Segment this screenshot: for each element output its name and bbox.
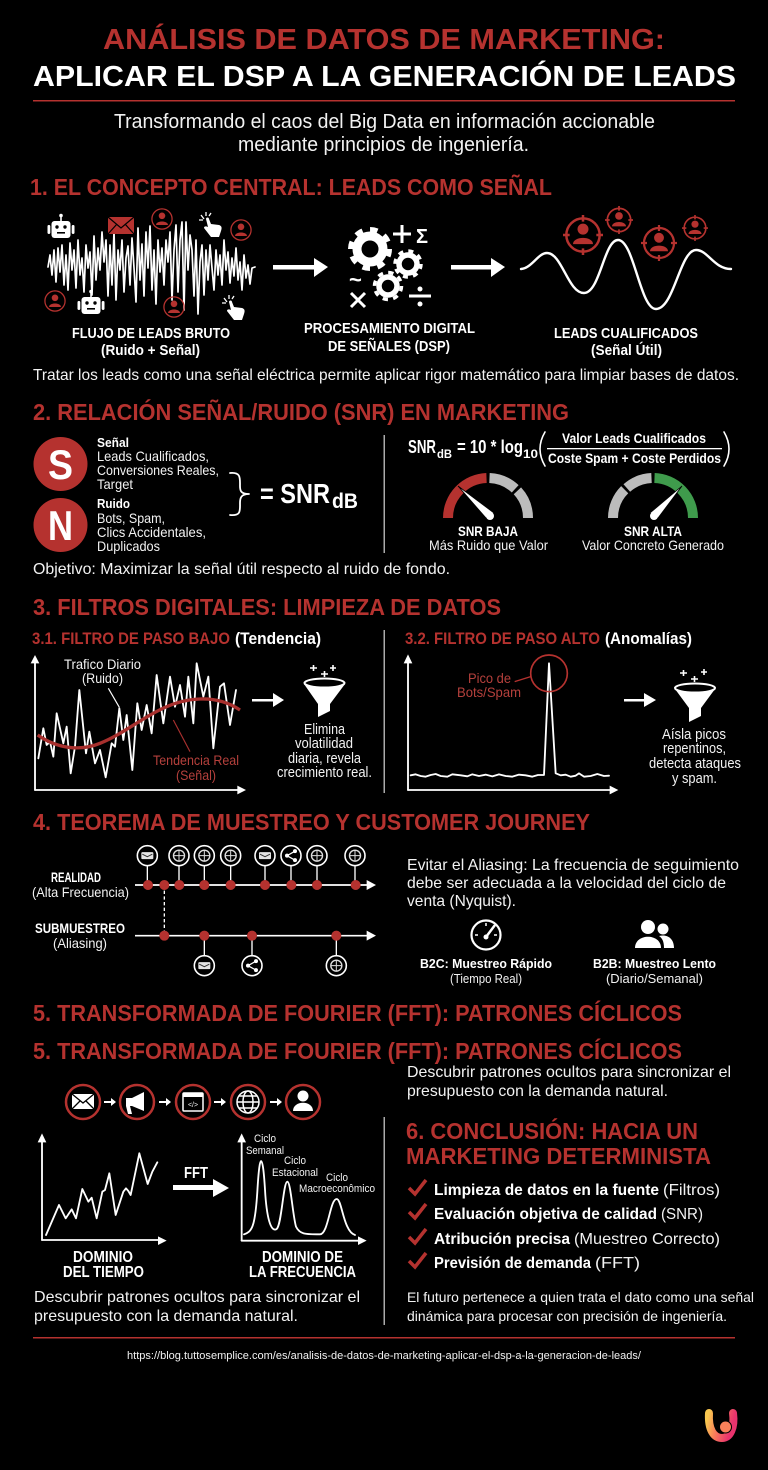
chart: low-pass: Tendencia Real [153, 752, 239, 768]
icon: people [635, 920, 674, 948]
title [33, 22, 736, 102]
label: DSP: PROCESAMIENTO DIGITAL [304, 320, 475, 337]
icon: gears and math [349, 225, 431, 307]
icon: click hand top [199, 212, 222, 237]
heading: section 5 repeated: 5. TRANSFORMADA DE FOURIER (FFT): PATRONES CÍCLICOS [33, 1037, 682, 1064]
label: time domain [63, 1249, 144, 1281]
list: conclusions: Previsión de demanda [434, 1255, 591, 1272]
label: time domain: DEL TIEMPO [63, 1264, 144, 1281]
text: FFT description left: Descubrir patrones ocultos para sincronizar el [34, 1289, 360, 1306]
icon: robot bottom [78, 290, 104, 314]
label: high SNR: Valor Concreto Generado [582, 537, 724, 553]
list: conclusions: (Filtros) [663, 1182, 720, 1199]
formula: SNR: Valor Leads Cualificados [562, 430, 706, 446]
icon: target lead 3 [641, 225, 677, 261]
label: DSP: DE SEÑALES (DSP) [328, 337, 450, 355]
chart: high-pass [404, 654, 618, 794]
text: high-pass description: Aísla picos [662, 726, 726, 743]
icon: target lead 1 [563, 215, 603, 255]
label: reality [32, 869, 129, 900]
text: section 1 caption: Tratar los leads como una señal eléctrica permite aplicar rigor matemático para limpiar bases de datos. [33, 367, 739, 384]
label: B2B: (Diario/Semanal) [606, 971, 703, 986]
icon: speedometer [472, 920, 500, 950]
formula: SNR: Coste Spam + Coste Perdidos [548, 450, 721, 466]
text: noise list: Bots, Spam, [97, 510, 165, 526]
list: conclusions [409, 1180, 720, 1272]
chart: frequency domain [237, 1133, 375, 1245]
text: high-pass description [649, 726, 741, 787]
text: equals SNR: dB [332, 490, 358, 513]
subtitle: mediante principios de ingeniería. [238, 134, 529, 156]
text: FFT description left: presupuesto con la demanda natural. [34, 1308, 298, 1325]
chart: high-pass: Pico de [468, 670, 511, 686]
text: aliasing explanation: debe ser adecuada a la velocidad del ciclo de [407, 875, 726, 892]
chart: sampling timelines [135, 846, 376, 976]
chart: frequency domain: Semanal [246, 1145, 284, 1157]
label: B2C [420, 956, 552, 986]
panel: section 1 concept [30, 173, 739, 384]
text: low-pass description: volatilidad [295, 735, 353, 752]
label: low SNR: SNR BAJA [458, 523, 518, 539]
icon: brace [230, 473, 249, 515]
label: raw flow [72, 325, 230, 359]
icon: S badge [34, 437, 88, 491]
label: B2B [593, 956, 716, 986]
label: time domain: DOMINIO [73, 1249, 133, 1266]
label: reality: REALIDAD [51, 869, 101, 885]
icon: person bottom 1 [45, 291, 65, 311]
formula: SNR: 10 [523, 447, 538, 461]
heading: low-pass: (Tendencia) [235, 629, 321, 648]
label: frequency domain: DOMINIO DE [262, 1249, 343, 1266]
text: low-pass description [277, 721, 372, 781]
label: qualified leads: (Señal Útil) [591, 341, 662, 359]
heading: section 6: 6. CONCLUSIÓN: HACIA UN [406, 1117, 698, 1144]
label: undersampling [35, 920, 125, 951]
heading: section 6: MARKETING DETERMINISTA [406, 1143, 711, 1169]
chart: journey icons: </> [188, 1102, 198, 1109]
text: signal list [97, 435, 219, 492]
heading: section 5: 5. TRANSFORMADA DE FOURIER (FFT): PATRONES CÍCLICOS [33, 999, 682, 1026]
text: closing statement: El futuro pertenece a quien trata el dato como una señal [407, 1289, 754, 1305]
label: reality: (Alta Frecuencia) [32, 884, 129, 900]
formula: SNR: SNR [408, 437, 436, 457]
heading: high-pass: 3.2. FILTRO DE PASO ALTO [405, 629, 600, 648]
label: B2B: B2B: Muestreo Lento [593, 956, 716, 971]
chart: high-pass: Bots/Spam [457, 684, 521, 700]
text: noise list: Duplicados [97, 538, 160, 554]
gauge: low SNR [448, 478, 528, 520]
label: undersampling: SUBMUESTREO [35, 920, 125, 936]
chart: frequency domain: Macroeconômico [299, 1183, 375, 1195]
panel: section 3 filters [31, 594, 741, 794]
text: closing statement [407, 1289, 754, 1324]
label: DSP [304, 320, 475, 355]
text: high-pass description: repentinos, [663, 740, 726, 757]
text: closing statement: dinámica para procesar con precisión de ingeniería. [407, 1308, 727, 1324]
panel: section 5 FFT [33, 999, 731, 1325]
text: aliasing explanation: Evitar el Aliasing: La frecuencia de seguimiento [407, 857, 739, 874]
text: low-pass description: Elimina [304, 721, 346, 738]
panel: section 6 conclusion [406, 1117, 754, 1324]
label: qualified leads [554, 325, 698, 359]
heading: high-pass: (Anomalías) [605, 629, 692, 648]
text: signal list: Target [97, 476, 133, 492]
text: low-pass description: crecimiento real. [277, 764, 372, 781]
label: B2C: B2C: Muestreo Rápido [420, 956, 552, 971]
icon: N badge [34, 498, 88, 552]
text: signal list: Conversiones Reales, [97, 462, 219, 478]
chart: low-pass: (Ruido) [82, 670, 123, 686]
icon: N badge: N [48, 502, 73, 549]
label: B2C: (Tiempo Real) [450, 971, 522, 986]
icon: funnel low-pass [304, 665, 345, 717]
chart: journey icons [66, 1085, 320, 1119]
text: FFT description right: Descubrir patrones ocultos para sincronizar el [407, 1064, 731, 1081]
text: source URL: https://blog.tuttosemplice.com/es/analisis-de-datos-de-marketing-aplicar-el-dsp-a-la-generacion-de-leads/ [127, 1350, 642, 1362]
arrow: low-pass [252, 693, 284, 707]
text: signal list: Señal [97, 435, 129, 450]
chart: frequency domain: Ciclo [326, 1172, 348, 1184]
label: qualified leads: LEADS CUALIFICADOS [554, 325, 698, 342]
icon: click hand bottom [222, 295, 245, 320]
formula: SNR: dB [437, 447, 452, 461]
chart: noisy raw signal [48, 222, 255, 314]
text: aliasing explanation: venta (Nyquist). [407, 893, 516, 910]
subtitle: Transformando el caos del Big Data en información accionable [114, 111, 655, 133]
text: FFT description right: presupuesto con la demanda natural. [407, 1083, 668, 1100]
heading: section 1: 1. EL CONCEPTO CENTRAL: LEADS COMO SEÑAL [30, 173, 552, 200]
text: aliasing explanation [407, 857, 739, 910]
icon: envelope [108, 217, 134, 234]
label: low SNR: Más Ruido que Valor [429, 537, 548, 553]
icon: gears and math: Σ [416, 226, 428, 248]
panel: section 4 sampling [32, 809, 739, 986]
label: high SNR [582, 523, 724, 553]
text: high-pass description: y spam. [672, 770, 717, 787]
chart: frequency domain: Ciclo [284, 1155, 306, 1167]
arrow: DSP to qualified [451, 258, 505, 277]
chart: low-pass: Trafico Diario [64, 656, 141, 672]
heading: section 2: 2. RELACIÓN SEÑAL/RUIDO (SNR) EN MARKETING [33, 398, 569, 425]
chart: frequency domain: Ciclo [254, 1133, 276, 1145]
chart: frequency domain: Estacional [272, 1167, 318, 1179]
title: ANÁLISIS DE DATOS DE MARKETING: [103, 22, 665, 56]
chart: low-pass: (Señal) [176, 767, 216, 783]
chart: clean signal [521, 240, 731, 309]
formula: SNR: = 10 * log [457, 437, 523, 457]
text: equals SNR: = SNR [260, 478, 330, 509]
icon: target lead 4 [682, 215, 708, 241]
arrow: FFT [173, 1165, 229, 1197]
text: FFT description left [34, 1289, 360, 1325]
label: raw flow: FLUJO DE LEADS BRUTO [72, 325, 230, 342]
heading: section 4: 4. TEOREMA DE MUESTREO Y CUSTOMER JOURNEY [33, 809, 590, 835]
heading: section 6 [406, 1117, 711, 1169]
gauge: high SNR [613, 478, 693, 520]
list: conclusions: Limpieza de datos en la fuente [434, 1182, 659, 1199]
icon: person top 1 [152, 209, 172, 229]
icon: target lead 2 [605, 206, 633, 234]
text: low-pass description: diaria, revela [288, 750, 362, 767]
icon: robot top [48, 214, 74, 238]
list: conclusions: (Muestreo Correcto) [574, 1231, 720, 1248]
text: noise list: Ruido [97, 496, 130, 511]
label: undersampling: (Aliasing) [53, 935, 107, 951]
chart: time domain [38, 1133, 167, 1245]
text: noise list [97, 496, 206, 554]
label: frequency domain [249, 1249, 356, 1281]
arrow: raw to DSP [273, 258, 328, 277]
arrow: FFT: FFT [184, 1165, 208, 1182]
arrow: high-pass [624, 693, 656, 707]
list: conclusions: (SNR) [661, 1206, 703, 1223]
text: FFT description right [407, 1064, 731, 1100]
list: conclusions: Evaluación objetiva de calidad [434, 1206, 657, 1223]
list: conclusions: Atribución precisa [434, 1231, 570, 1248]
formula: SNR [408, 430, 729, 466]
icon: funnel high-pass [675, 669, 715, 722]
text: noise list: Clics Accidentales, [97, 524, 206, 540]
icon: S badge: S [48, 441, 73, 488]
list: conclusions: (FFT) [595, 1255, 640, 1272]
panel: section 2 SNR [33, 398, 729, 578]
icon: gears and math: ~ [349, 267, 362, 292]
label: raw flow: (Ruido + Señal) [101, 342, 200, 359]
icon: person top 2 [231, 220, 251, 240]
title: APLICAR EL DSP A LA GENERACIÓN DE LEADS [33, 59, 736, 93]
text: high-pass description: detecta ataques [649, 755, 741, 772]
text: signal list: Leads Cualificados, [97, 448, 209, 464]
heading: section 3: 3. FILTROS DIGITALES: LIMPIEZA DE DATOS [33, 594, 501, 620]
text: objective: Objetivo: Maximizar la señal útil respecto al ruido de fondo. [33, 561, 450, 578]
label: high SNR: SNR ALTA [624, 523, 682, 539]
icon: logo [709, 1413, 733, 1438]
chart: low-pass [31, 655, 246, 794]
heading: low-pass: 3.1. FILTRO DE PASO BAJO [32, 629, 230, 648]
label: frequency domain: LA FRECUENCIA [249, 1264, 356, 1281]
icon: person bottom 2 [164, 297, 184, 317]
subtitle [114, 111, 655, 156]
label: low SNR [429, 523, 548, 553]
